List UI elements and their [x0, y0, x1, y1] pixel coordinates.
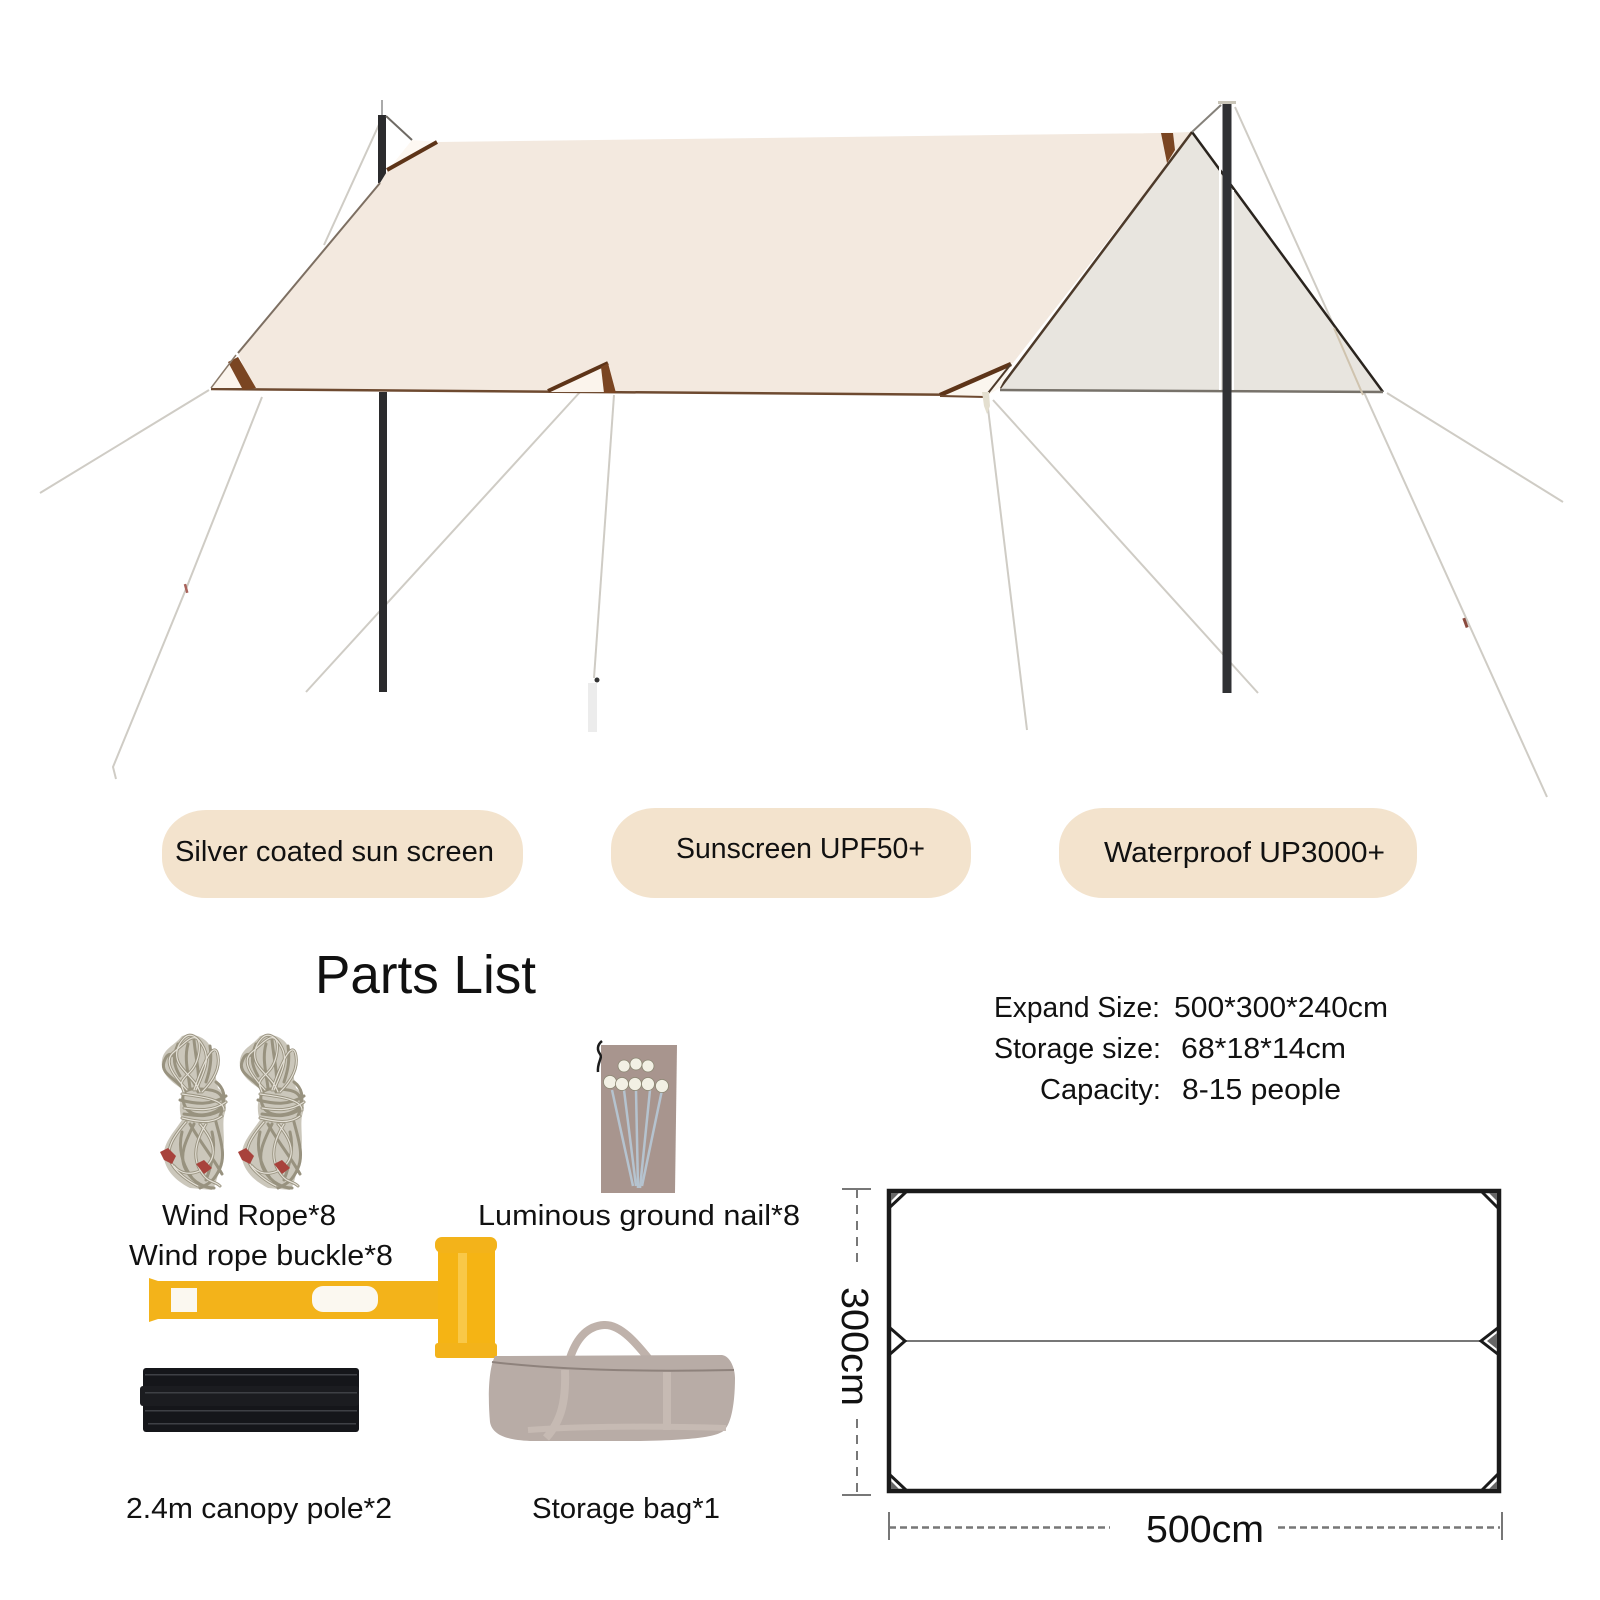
- strap: top right: [1161, 133, 1175, 163]
- icon: ground nails in bag: [598, 1041, 677, 1193]
- feature pill: silver coating: Silver coated sun screen: [175, 836, 494, 868]
- width dimension: [889, 1512, 1502, 1540]
- height label: 300cm: [833, 1287, 875, 1406]
- side wall triangle: [1000, 132, 1383, 392]
- feature pill: UPF: [611, 808, 971, 898]
- specifications: 500*300*240cm: [1174, 992, 1388, 1024]
- side wall outline: [1000, 105, 1383, 395]
- rope tag: [588, 678, 600, 732]
- icon: black canopy poles: [140, 1368, 359, 1432]
- icon: storage bag: [489, 1325, 735, 1441]
- canopy outline: [211, 183, 980, 395]
- right pole: [1218, 101, 1236, 693]
- label: canopy pole: 2.4m canopy pole*2: [126, 1493, 392, 1525]
- corner: bottom left: [211, 355, 256, 390]
- label: storage bag: Storage bag*1: [532, 1493, 720, 1525]
- heading: parts list: Parts List: [315, 945, 536, 1005]
- specifications: [994, 992, 1388, 1106]
- guy ropes: [40, 107, 1563, 797]
- rope coil right: [238, 1035, 304, 1190]
- tent illustration: [40, 100, 1563, 797]
- corner: bottom right of roof: [940, 363, 1013, 414]
- specifications: 68*18*14cm: [1181, 1033, 1346, 1065]
- tarp outline: [889, 1191, 1499, 1491]
- corner: top left: [386, 116, 438, 170]
- label: wind rope: Wind Rope*8: [162, 1200, 336, 1232]
- width label: 500cm: [1146, 1509, 1264, 1551]
- label: ground nail: Luminous ground nail*8: [478, 1200, 800, 1232]
- corner: bottom middle: [548, 363, 616, 393]
- specifications: Expand Size:: [994, 992, 1160, 1024]
- feature pill: UPF: Sunscreen UPF50+: [676, 833, 925, 865]
- dimension diagram: [833, 1189, 1502, 1551]
- left pole: [378, 100, 387, 692]
- height dimension: [842, 1189, 871, 1495]
- specifications: 8-15 people: [1182, 1074, 1341, 1106]
- feature pill: waterproof: Waterproof UP3000+: [1104, 837, 1385, 869]
- specifications: Storage size:: [994, 1033, 1161, 1065]
- canopy roof panel: [238, 132, 1192, 394]
- rope coil left: [160, 1035, 226, 1190]
- icon: yellow wind rope buckle: [149, 1237, 497, 1358]
- icon: wind ropes: [160, 1035, 304, 1190]
- feature pill: silver coating: [162, 810, 523, 898]
- rope adjusters: [184, 584, 1469, 628]
- specifications: Capacity:: [1040, 1074, 1161, 1106]
- feature pill: waterproof: [1059, 808, 1417, 898]
- corner tabs: [891, 1193, 1497, 1489]
- label: rope buckle: Wind rope buckle*8: [129, 1240, 393, 1272]
